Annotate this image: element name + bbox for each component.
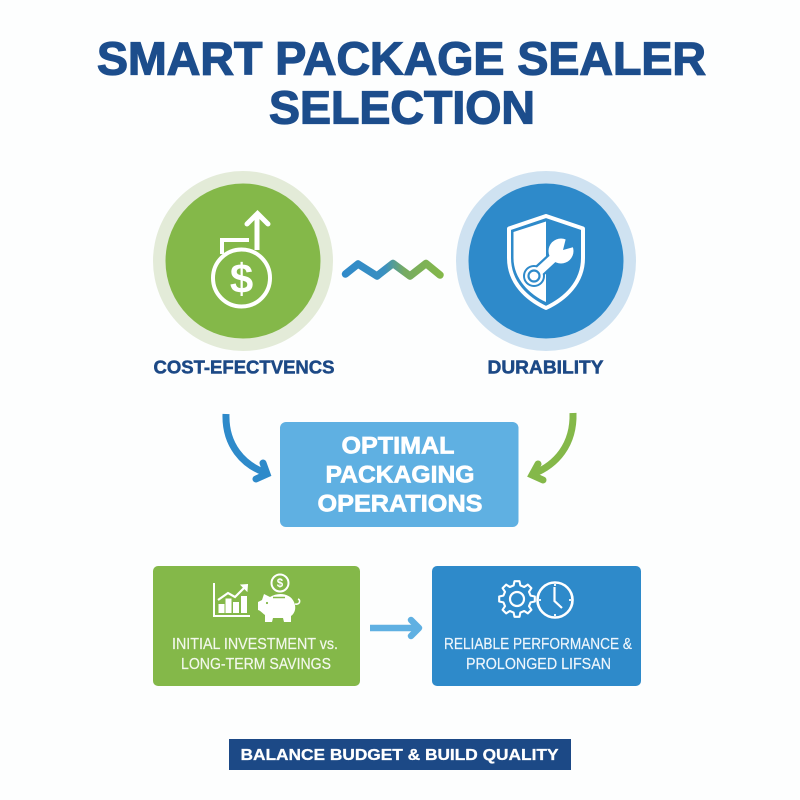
panel: initial investment [153,566,360,686]
icon: dollar coin with rising arrow: $ [230,255,253,302]
title [97,32,706,134]
panel: initial investment: INITIAL INVESTMENT vs. [172,636,338,653]
arrow: green curved arrow [532,413,573,480]
footer banner: BALANCE BUDGET & BUILD QUALITY [240,747,559,764]
icon: piggy bank with coin [258,574,300,622]
title: SELECTION [269,82,535,134]
panel: reliable performance: PROLONGED LIFSAN [466,656,611,673]
icon: growth chart [214,583,250,616]
icon: gear [499,581,535,617]
footer banner [229,739,571,770]
panel: cost-effectiveness circle [153,171,333,351]
label: cost-effectiveness: COST-EFECTVENCS [154,358,334,378]
icon: connecting wave [346,264,440,276]
infographic content [97,32,706,770]
panel: optimal packaging operations: OPERATIONS [318,490,482,518]
icon: clock [538,582,572,618]
panel: optimal packaging operations [280,422,518,527]
arrow: blue curved arrow [226,414,267,479]
panel: reliable performance: RELIABLE PERFORMANCE & [444,636,632,653]
title: SMART PACKAGE SEALER [97,32,706,84]
panel: optimal packaging operations: OPTIMAL [342,432,455,460]
panel: initial investment: LONG-TERM SAVINGS [181,656,331,673]
icon: piggy bank with coin: $ [277,578,284,590]
panel: reliable performance [432,566,641,686]
icon: dollar coin with rising arrow [213,214,270,306]
label: durability: DURABILITY [488,358,604,378]
arrow: between panels [370,620,419,636]
icon: shield with wrench [509,216,583,308]
panel: optimal packaging operations: PACKAGING [326,462,474,488]
panel: durability circle [456,171,636,351]
